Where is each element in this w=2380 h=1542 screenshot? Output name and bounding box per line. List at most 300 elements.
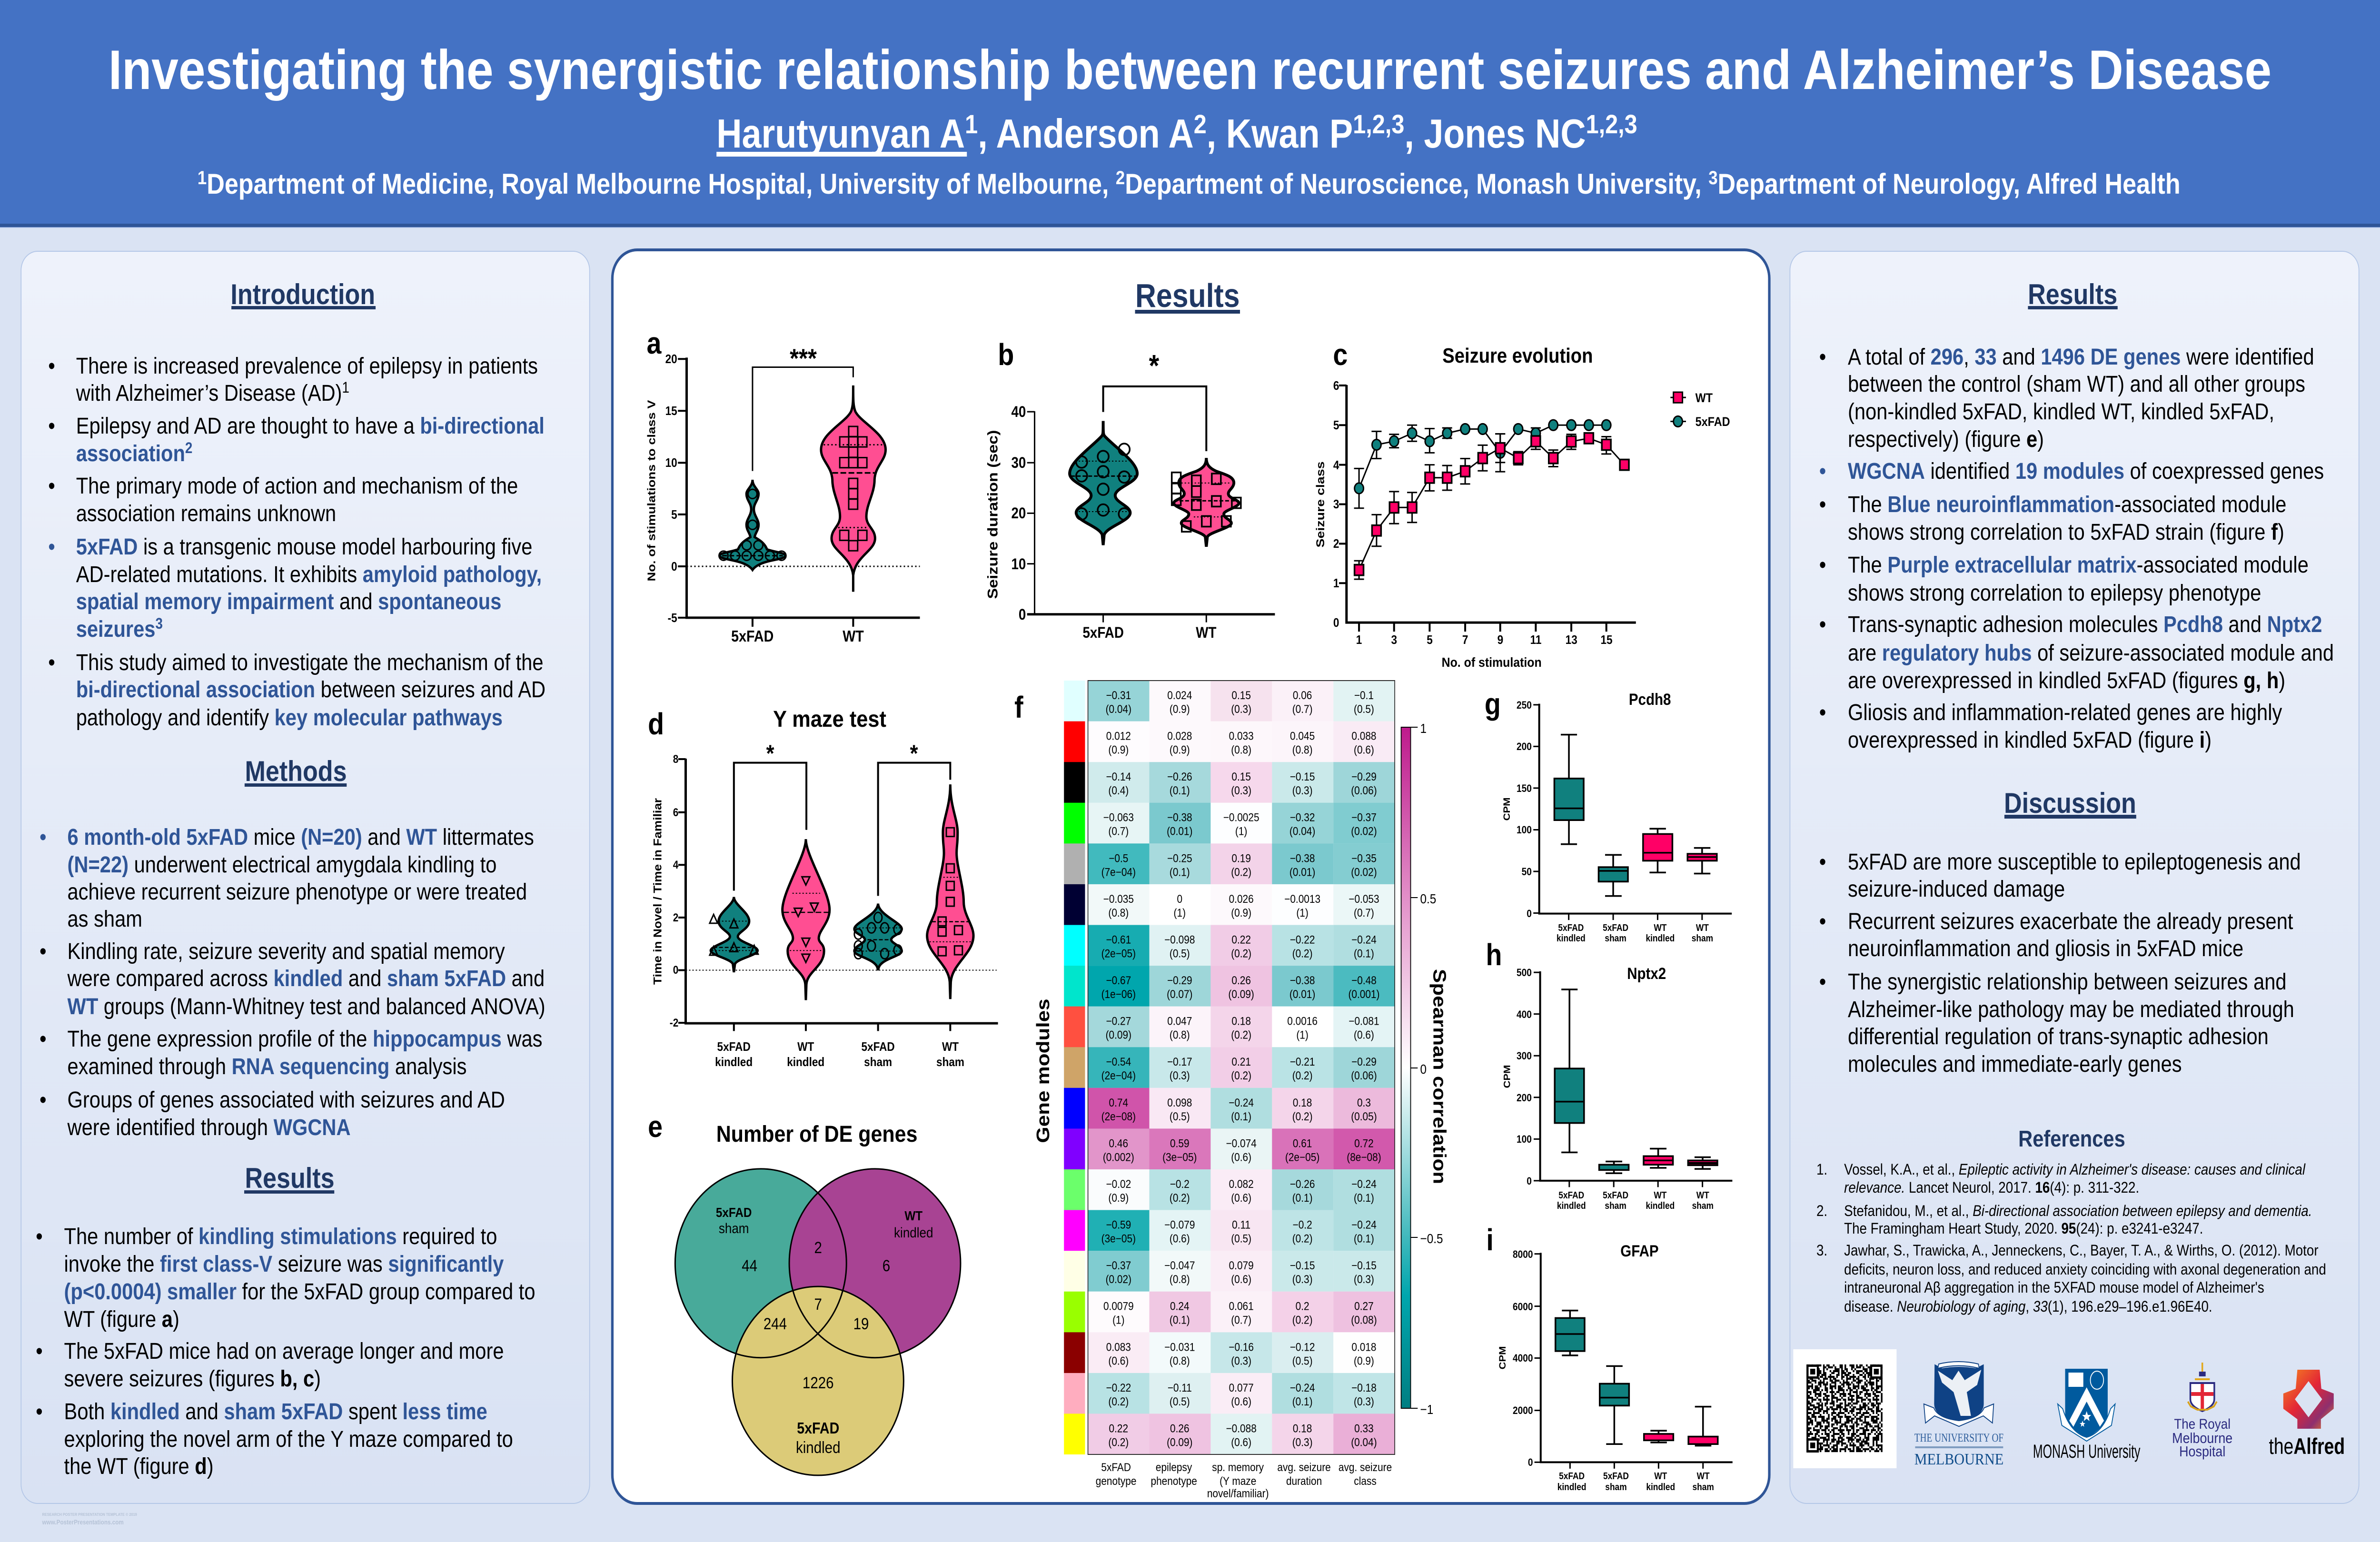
chart i: box plot GFAP: i — [1486, 1223, 1494, 1257]
chart i: box plot GFAP: 0 — [1528, 1457, 1533, 1468]
heatmap cells: (0.2) — [1231, 866, 1251, 879]
chart e: Venn diagram, number of DE genes: 2 — [814, 1238, 822, 1256]
chart c: line chart, seizure evolution: 13 — [1566, 633, 1577, 647]
chart h: box plot Nptx2: Nptx2 — [1627, 964, 1666, 982]
colour bar legend: −0.5 — [1420, 1231, 1443, 1246]
text block: references: 3. — [1816, 1242, 1827, 1259]
affiliations: 3 — [1708, 167, 1718, 188]
heatmap cells: −0.38 — [1167, 811, 1192, 824]
heatmap cells: −0.27 — [1106, 1015, 1131, 1028]
chart d: violin, Y maze test: sham — [936, 1056, 964, 1069]
chart e: Venn diagram, number of DE genes: sham — [719, 1220, 749, 1236]
chart d: violin, Y maze test: 2 — [673, 911, 678, 924]
heatmap cells: (0.6) — [1231, 1192, 1251, 1204]
chart d: violin, Y maze test: 8 — [673, 753, 678, 765]
logo: Monash University — [2033, 1369, 2141, 1462]
chart e: Venn diagram, number of DE genes: 5xFAD — [716, 1205, 752, 1220]
column labels: avg. seizure — [1277, 1461, 1331, 1473]
authors: 1,2,3 — [1586, 110, 1637, 139]
colour bar legend: 0 — [1420, 1061, 1427, 1077]
chart b: violin, seizure duration: 0 — [1019, 606, 1026, 623]
heatmap cells: −0.088 — [1226, 1422, 1257, 1435]
authors: , Kwan P — [1207, 111, 1353, 156]
heatmap cells: (0.3) — [1231, 703, 1251, 715]
text block: results bullets (right): • — [1819, 344, 1826, 370]
heatmap cells: 0.012 — [1106, 730, 1131, 742]
chart e: Venn diagram, number of DE genes — [648, 1109, 961, 1475]
text block: introduction bullets: • — [48, 534, 55, 560]
chart a: violin, stimulations to class V — [645, 326, 920, 645]
text block: methods bullets: examined through RNA sequencing analysis — [67, 1053, 466, 1079]
heatmap cells: (2e−05) — [1285, 1151, 1319, 1164]
text block: discussion bullets: • — [1819, 908, 1826, 934]
heatmap cells: (0.1) — [1170, 1314, 1190, 1326]
chart h: box plot Nptx2: sham — [1692, 1200, 1714, 1211]
heatmap cells: (0.6) — [1108, 1354, 1129, 1367]
chart e: Venn diagram, number of DE genes: kindled — [894, 1225, 933, 1240]
chart c: line chart, seizure evolution: 11 — [1530, 633, 1541, 647]
chart c: line chart, seizure evolution: c — [1333, 337, 1348, 372]
template footnote: RESEARCH POSTER PRESENTATION TEMPLATE © 2019 — [42, 1512, 137, 1517]
heatmap cells: 0.3 — [1357, 1096, 1371, 1109]
chart c: line chart, seizure evolution: 1 — [1333, 577, 1339, 590]
heatmap cells: −0.18 — [1351, 1382, 1377, 1394]
heatmap cells: 0.11 — [1232, 1218, 1250, 1231]
chart h: box plot Nptx2: sham — [1605, 1200, 1626, 1211]
chart g: box plot Pcdh8: 250 — [1517, 700, 1532, 711]
heatmap cells: (0.8) — [1231, 743, 1251, 756]
logo: Royal Melbourne Hospital: The Royal — [2174, 1416, 2231, 1432]
logo: The Alfred: theAlfred — [2269, 1434, 2345, 1459]
text block: results bullets (left): WT (figure a) — [64, 1306, 179, 1332]
chart h: box plot Nptx2: WT — [1696, 1190, 1709, 1200]
heatmap cells: 0.27 — [1354, 1300, 1374, 1313]
chart a: violin, stimulations to class V: 0 — [671, 560, 677, 573]
chart g: box plot Pcdh8: 5xFAD — [1558, 922, 1584, 933]
chart e: Venn diagram, number of DE genes: kindled — [796, 1438, 841, 1456]
chart g: box plot Pcdh8: kindled — [1646, 933, 1675, 943]
text block: methods bullets: • — [40, 824, 47, 850]
chart d: violin, Y maze test — [648, 706, 998, 1069]
text block: references: disease. Neurobiology of aging, 33(1), 196.e29–196.e1.96E40. — [1844, 1298, 2212, 1315]
chart e: Venn diagram, number of DE genes: WT — [904, 1208, 922, 1223]
heatmap cells: (0.9) — [1354, 1354, 1374, 1367]
heatmap cells: 0.033 — [1229, 730, 1254, 742]
heatmap cells — [1088, 681, 1395, 1454]
chart d: violin, Y maze test: d — [648, 707, 664, 741]
heatmap cells: (0.1) — [1292, 1192, 1313, 1204]
heatmap cells: 0.46 — [1109, 1137, 1128, 1150]
heatmap cells: −0.1 — [1354, 689, 1374, 702]
heatmap cells: (1) — [1112, 1314, 1125, 1326]
chart a: violin, stimulations to class V: 5xFAD — [731, 627, 774, 645]
heatmap cells: (0.6) — [1231, 1151, 1251, 1164]
chart g: box plot Pcdh8: 50 — [1522, 866, 1532, 878]
heatmap cells: −0.61 — [1106, 933, 1131, 946]
heatmap cells: −0.035 — [1103, 893, 1134, 905]
text block: results bullets (left): • — [36, 1338, 43, 1364]
chart i: box plot GFAP: WT — [1697, 1471, 1710, 1481]
heatmap cells: (0.09) — [1167, 1436, 1193, 1449]
heatmap cells: −0.031 — [1164, 1341, 1195, 1354]
affiliations: 1 — [198, 167, 207, 188]
chart a: violin, stimulations to class V: WT — [843, 627, 864, 645]
heatmap cells: (0.2) — [1292, 1110, 1313, 1123]
chart i: box plot GFAP — [1486, 1223, 1733, 1492]
text block: introduction bullets: seizures — [76, 616, 155, 642]
heatmap cells: (0.1) — [1170, 784, 1190, 797]
heatmap cells: (0.6) — [1231, 1395, 1251, 1408]
chart i: box plot GFAP: 4000 — [1513, 1353, 1533, 1364]
heatmap cells: 0.26 — [1231, 974, 1251, 987]
chart g: box plot Pcdh8: 5xFAD — [1603, 922, 1628, 933]
text block: results bullets (right): • — [1819, 699, 1826, 725]
heatmap cells: 0.0016 — [1287, 1015, 1318, 1028]
chart i: box plot GFAP: sham — [1692, 1482, 1714, 1492]
heatmap cells: (0.2) — [1231, 1028, 1251, 1041]
logo: University of Melbourne: THE UNIVERSITY OF — [1914, 1432, 2003, 1444]
heatmap cells: 0.077 — [1229, 1382, 1254, 1394]
column labels: epilepsy — [1156, 1461, 1192, 1473]
chart e: Venn diagram, number of DE genes: e — [648, 1109, 663, 1144]
heatmap cells: 0.61 — [1293, 1137, 1312, 1150]
panel: right column — [1790, 251, 2359, 1503]
heatmap cells: −0.21 — [1290, 1056, 1315, 1068]
heatmap cells: 0.15 — [1231, 689, 1251, 702]
heatmap cells: (0.3) — [1354, 1395, 1374, 1408]
logo: Royal Melbourne Hospital: Melbourne — [2172, 1430, 2232, 1446]
text block: results bullets (right): • — [1819, 611, 1826, 637]
text block: introduction bullets: AD-related mutations. It exhibits amyloid pathology, — [76, 561, 542, 587]
logo: Royal Melbourne Hospital — [2172, 1363, 2232, 1460]
column labels — [1096, 1461, 1392, 1500]
heatmap cells: −0.24 — [1229, 1096, 1254, 1109]
chart c: line chart, seizure evolution: 15 — [1600, 633, 1613, 647]
logo: University of Melbourne — [1914, 1362, 2003, 1468]
heatmap cells: (0.9) — [1170, 703, 1190, 715]
text block: introduction bullets: association — [76, 440, 185, 466]
heatmap cells: (0.7) — [1354, 907, 1374, 919]
column labels: (Y maze — [1220, 1475, 1256, 1487]
text block: references — [1816, 1161, 2326, 1315]
text block: results bullets (right): respectively) (figure e) — [1848, 426, 2044, 452]
heatmap cells: −0.37 — [1106, 1259, 1131, 1272]
chart g: box plot Pcdh8: WT — [1696, 922, 1709, 933]
heatmap cells: −0.67 — [1106, 974, 1131, 987]
heatmap cells: (0.5) — [1170, 1110, 1190, 1123]
heatmap cells: (0.7) — [1231, 1314, 1251, 1326]
heatmap cells: (0.2) — [1231, 947, 1251, 960]
heatmap cells: −0.074 — [1226, 1137, 1257, 1150]
heatmap cells: 0.061 — [1229, 1300, 1254, 1313]
heatmap cells: (0.5) — [1170, 1395, 1190, 1408]
heatmap cells: −0.48 — [1351, 974, 1377, 987]
heatmap cells: −0.24 — [1351, 933, 1377, 946]
heatmap cells: 0.026 — [1229, 893, 1254, 905]
chart a: violin, stimulations to class V: 15 — [665, 405, 677, 418]
logo: The Alfred — [2269, 1370, 2345, 1459]
chart e: Venn diagram, number of DE genes: 1226 — [803, 1374, 834, 1392]
heatmap cells: (0.8) — [1170, 1273, 1190, 1285]
affiliations: Department of Neuroscience, Monash University, — [1125, 168, 1708, 200]
heatmap cells: (0.04) — [1289, 825, 1315, 838]
chart g: box plot Pcdh8: 100 — [1517, 824, 1532, 836]
text block: results bullets (right): WGCNA identified 19 modules of coexpressed genes — [1848, 458, 2324, 484]
chart i: box plot GFAP: kindled — [1646, 1482, 1675, 1492]
heatmap cells: (0.8) — [1170, 1028, 1190, 1041]
colour bar legend: 0.5 — [1420, 891, 1436, 906]
text block: introduction bullets: 2 — [185, 440, 192, 456]
chart g: box plot Pcdh8: 0 — [1527, 908, 1532, 919]
heatmap cells: (2e−05) — [1101, 947, 1136, 960]
heatmap cells: 0.26 — [1170, 1422, 1190, 1435]
chart a: violin, stimulations to class V: a — [647, 326, 662, 360]
heatmap cells: −0.32 — [1290, 811, 1315, 824]
column labels: 5xFAD — [1101, 1461, 1131, 1473]
chart b: violin, seizure duration: 5xFAD — [1082, 624, 1124, 641]
text block: discussion bullets: neuroinflammation and gliosis in 5xFAD mice — [1848, 935, 2243, 961]
heatmap cells: (0.04) — [1351, 1436, 1377, 1449]
chart h: box plot Nptx2: CPM — [1502, 1065, 1512, 1088]
chart i: box plot GFAP: CPM — [1498, 1346, 1508, 1369]
chart h: box plot Nptx2: 0 — [1527, 1176, 1532, 1187]
authors: 1,2,3 — [1353, 110, 1404, 139]
chart f: module-trait correlation heatmap: f — [1014, 690, 1024, 724]
column labels: phenotype — [1150, 1475, 1197, 1487]
heatmap cells: −0.24 — [1351, 1178, 1377, 1190]
heatmap cells: (3e−05) — [1162, 1151, 1197, 1164]
text block: results bullets (left): The 5xFAD mice had on average longer and more — [64, 1338, 504, 1364]
column labels: genotype — [1096, 1475, 1136, 1487]
text block: results bullets (left): • — [36, 1398, 43, 1424]
chart i: box plot GFAP: 5xFAD — [1559, 1471, 1585, 1481]
heatmap cells: 0.72 — [1354, 1137, 1374, 1150]
heatmap cells: (8e−08) — [1347, 1151, 1381, 1164]
text block: results bullets (left): Both kindled and sham 5xFAD spent less time — [64, 1398, 487, 1424]
chart d: violin, Y maze test: -2 — [670, 1017, 678, 1029]
chart g: box plot Pcdh8: CPM — [1502, 798, 1512, 820]
heading: Results (centre): Results — [1135, 277, 1240, 314]
chart e: Venn diagram, number of DE genes: 7 — [814, 1295, 822, 1313]
heatmap cells: (0.8) — [1170, 1354, 1190, 1367]
heatmap cells: −0.26 — [1290, 1178, 1315, 1190]
heatmap cells: (0.9) — [1108, 743, 1129, 756]
heatmap cells: −0.37 — [1351, 811, 1377, 824]
logo: Monash University: MONASH University — [2033, 1441, 2141, 1462]
heatmap cells: −0.29 — [1351, 1056, 1377, 1068]
chart g: box plot Pcdh8: 150 — [1517, 783, 1532, 794]
heatmap cells: −0.25 — [1167, 852, 1192, 865]
colour bar legend — [1401, 721, 1450, 1417]
heatmap cells: (0.08) — [1351, 1314, 1377, 1326]
heatmap cells: (1) — [1296, 907, 1309, 919]
heatmap cells: 0.22 — [1109, 1422, 1128, 1435]
heatmap cells: 0.047 — [1167, 1015, 1192, 1028]
heatmap cells: (0.6) — [1231, 1436, 1251, 1449]
text block: results bullets (left) — [36, 1223, 536, 1479]
heatmap cells: −0.15 — [1351, 1259, 1377, 1272]
chart i: box plot GFAP: WT — [1654, 1471, 1667, 1481]
text block: discussion bullets: The synergistic relationship between seizures and — [1848, 969, 2287, 995]
legend markers — [1670, 392, 1686, 427]
heatmap cells: −0.098 — [1164, 933, 1195, 946]
text block: results bullets (right): • — [1819, 552, 1826, 578]
chart b: violin, seizure duration: Seizure duration (sec) — [985, 430, 1001, 599]
chart h: box plot Nptx2: 400 — [1517, 1009, 1532, 1020]
chart b: violin, seizure duration: 20 — [1011, 505, 1026, 522]
heatmap cells: (0.06) — [1351, 1069, 1377, 1082]
text block: methods bullets — [40, 824, 545, 1140]
chart h: box plot Nptx2 — [1486, 938, 1732, 1211]
chart c: line chart, seizure evolution: 2 — [1333, 537, 1339, 551]
text block: discussion bullets: differential regulation of trans-synaptic adhesion — [1848, 1023, 2269, 1049]
chart d: violin, Y maze test: Time in Novel / Time in Familiar — [651, 798, 664, 985]
heatmap cells: (0.001) — [1348, 988, 1379, 1000]
heatmap cells: (3e−05) — [1101, 1232, 1136, 1245]
text block: discussion bullets: 5xFAD are more susceptible to epileptogenesis and — [1848, 849, 2301, 875]
heatmap cells: (0.3) — [1170, 1069, 1190, 1082]
chart g: box plot Pcdh8: 200 — [1517, 741, 1532, 752]
chart h: box plot Nptx2: kindled — [1557, 1200, 1586, 1211]
text block: results bullets (left): exploring the novel arm of the Y maze compared to — [64, 1426, 513, 1452]
chart b: violin, seizure duration: 10 — [1011, 556, 1026, 573]
authors: 1 — [965, 110, 978, 139]
heatmap cells: 0.19 — [1231, 852, 1251, 865]
heatmap cells: −0.15 — [1290, 771, 1315, 783]
chart i: box plot GFAP: GFAP — [1620, 1242, 1659, 1260]
heatmap cells: (0.1) — [1170, 866, 1190, 879]
heatmap cells: 0.74 — [1109, 1096, 1128, 1109]
heatmap cells: 0.098 — [1167, 1096, 1192, 1109]
chart c: line chart, seizure evolution: 6 — [1333, 379, 1339, 393]
panel: central results — [612, 250, 1769, 1503]
heatmap cells: (0.07) — [1167, 988, 1193, 1000]
chart b: violin, seizure duration: WT — [1196, 624, 1216, 641]
heatmap cells: (0.8) — [1108, 907, 1129, 919]
text block: discussion bullets — [1819, 849, 2301, 1077]
heatmap cells: 0.15 — [1231, 771, 1251, 783]
chart d: violin, Y maze test: sham — [864, 1056, 892, 1069]
colour bar legend: Spearman correlation — [1429, 969, 1450, 1184]
chart title: Seizure evolution: Seizure evolution — [1442, 344, 1593, 367]
heatmap cells: −0.22 — [1106, 1382, 1131, 1394]
column labels: class — [1354, 1475, 1377, 1487]
chart f: module-trait correlation heatmap: Gene modules — [1033, 998, 1053, 1143]
heatmap cells: (0.3) — [1231, 1354, 1251, 1367]
text block: results bullets (right): • — [1819, 491, 1826, 517]
text block: references: The Framingham Heart Study, 2020. 95(24): p. e3241-e3247. — [1844, 1220, 2203, 1237]
heatmap cells: (0.8) — [1292, 743, 1313, 756]
text block: results bullets (left): the WT (figure d) — [64, 1453, 214, 1479]
text block: results bullets (left): severe seizures (figures b, c) — [64, 1365, 321, 1392]
heatmap cells: −0.11 — [1168, 1382, 1192, 1394]
text block: introduction bullets: with Alzheimer’s Disease (AD) — [76, 380, 342, 406]
authors: , Anderson A — [978, 111, 1194, 156]
chart d: violin, Y maze test: * — [910, 740, 918, 767]
text block: results bullets (right): Trans-synaptic adhesion molecules Pcdh8 and Nptx2 — [1848, 611, 2322, 637]
chart d: violin, Y maze test: 5xFAD — [862, 1040, 895, 1054]
column labels: duration — [1286, 1475, 1322, 1487]
heatmap cells: (0.1) — [1354, 1192, 1374, 1204]
column labels: avg. seizure — [1339, 1461, 1392, 1473]
text block: results bullets (left): invoke the first class-V seizure was significantly — [64, 1251, 504, 1277]
heatmap cells: (0.9) — [1108, 1192, 1129, 1204]
chart a: violin, stimulations to class V: -5 — [668, 612, 677, 625]
text block: methods bullets: The gene expression profile of the hippocampus was — [67, 1026, 542, 1052]
chart g: box plot Pcdh8: sham — [1692, 933, 1713, 943]
heatmap cells: −0.047 — [1164, 1259, 1195, 1272]
heatmap cells: (0.3) — [1292, 1273, 1313, 1285]
chart h: box plot Nptx2: kindled — [1646, 1200, 1675, 1211]
heatmap cells: (0.002) — [1103, 1151, 1134, 1164]
chart g: box plot Pcdh8: g — [1485, 687, 1501, 721]
chart a: violin, stimulations to class V: 10 — [665, 456, 677, 470]
heatmap cells: −0.0013 — [1284, 893, 1320, 905]
heatmap cells: (2e−04) — [1101, 1069, 1136, 1082]
chart d: violin, Y maze test: WT — [797, 1040, 814, 1054]
chart c: line chart, seizure evolution: 3 — [1391, 633, 1397, 647]
chart d: violin, Y maze test: 5xFAD — [717, 1040, 751, 1054]
chart c: line chart, seizure evolution: 4 — [1333, 459, 1339, 472]
text block: introduction bullets: 5xFAD is a transgenic mouse model harbouring five — [76, 534, 532, 560]
heatmap cells: 0.018 — [1351, 1341, 1377, 1354]
title: Investigating the synergistic relationship between recurrent seizures and Alzheimer’s Disease — [109, 39, 2271, 101]
chart e: Venn diagram, number of DE genes: 44 — [742, 1256, 757, 1275]
column labels: sp. memory — [1212, 1461, 1264, 1473]
text block: results bullets (right): The Blue neuroinflammation-associated module — [1848, 491, 2286, 517]
chart a: violin, stimulations to class V: 20 — [665, 353, 677, 366]
heatmap cells: (0.2) — [1170, 1192, 1190, 1204]
heatmap cells: −0.59 — [1106, 1218, 1131, 1231]
chart g: box plot Pcdh8: kindled — [1557, 933, 1586, 943]
text block: results bullets (right): (non-kindled 5xFAD, kindled WT, kindled 5xFAD, — [1848, 398, 2274, 425]
heading: References: References — [2018, 1126, 2125, 1152]
heatmap cells: −0.14 — [1106, 771, 1131, 783]
heatmap cells: −0.31 — [1106, 689, 1131, 702]
heatmap cells: (0.02) — [1106, 1273, 1131, 1285]
heatmap cells: (0.2) — [1292, 1232, 1313, 1245]
heatmap cells: −0.02 — [1106, 1178, 1131, 1190]
chart c: line chart, seizure evolution: 5 — [1427, 633, 1433, 647]
chart h: box plot Nptx2: WT — [1654, 1190, 1667, 1200]
heatmap cells: 0.028 — [1167, 730, 1192, 742]
heatmap cells: −0.2 — [1170, 1178, 1190, 1190]
QR code — [1793, 1349, 1896, 1468]
authors: Harutyunyan A — [716, 111, 965, 156]
authors: 2 — [1194, 110, 1207, 139]
heatmap cells: (2e−08) — [1101, 1110, 1136, 1123]
chart b: violin, seizure duration: b — [998, 337, 1014, 372]
heatmap cells: (0.01) — [1289, 866, 1315, 879]
heatmap cells: (0.05) — [1351, 1110, 1377, 1123]
chart c: line chart, seizure evolution — [1314, 337, 1730, 670]
heatmap cells: −0.053 — [1349, 893, 1379, 905]
template footnote — [42, 1512, 137, 1526]
text block: introduction bullets: pathology and identify key molecular pathways — [76, 704, 503, 731]
authors — [716, 110, 1637, 157]
text block: results bullets (right): overexpressed in kindled 5xFAD (figure i) — [1848, 727, 2211, 753]
chart h: box plot Nptx2: 100 — [1517, 1134, 1532, 1145]
text block: discussion bullets: • — [1819, 969, 1826, 995]
chart a: violin, stimulations to class V: No. of stimulations to class V — [645, 400, 658, 581]
heatmap cells: 0.21 — [1231, 1056, 1251, 1068]
text block: results bullets (left): The number of kindling stimulations required to — [64, 1223, 497, 1249]
heatmap cells: (1) — [1296, 1028, 1309, 1041]
chart f: module-trait correlation heatmap — [1014, 681, 1450, 1500]
heatmap cells: (0.6) — [1354, 1028, 1374, 1041]
chart c: line chart, seizure evolution: 3 — [1333, 498, 1339, 511]
text block: discussion bullets: Alzheimer-like pathology may be mediated through — [1848, 996, 2294, 1022]
